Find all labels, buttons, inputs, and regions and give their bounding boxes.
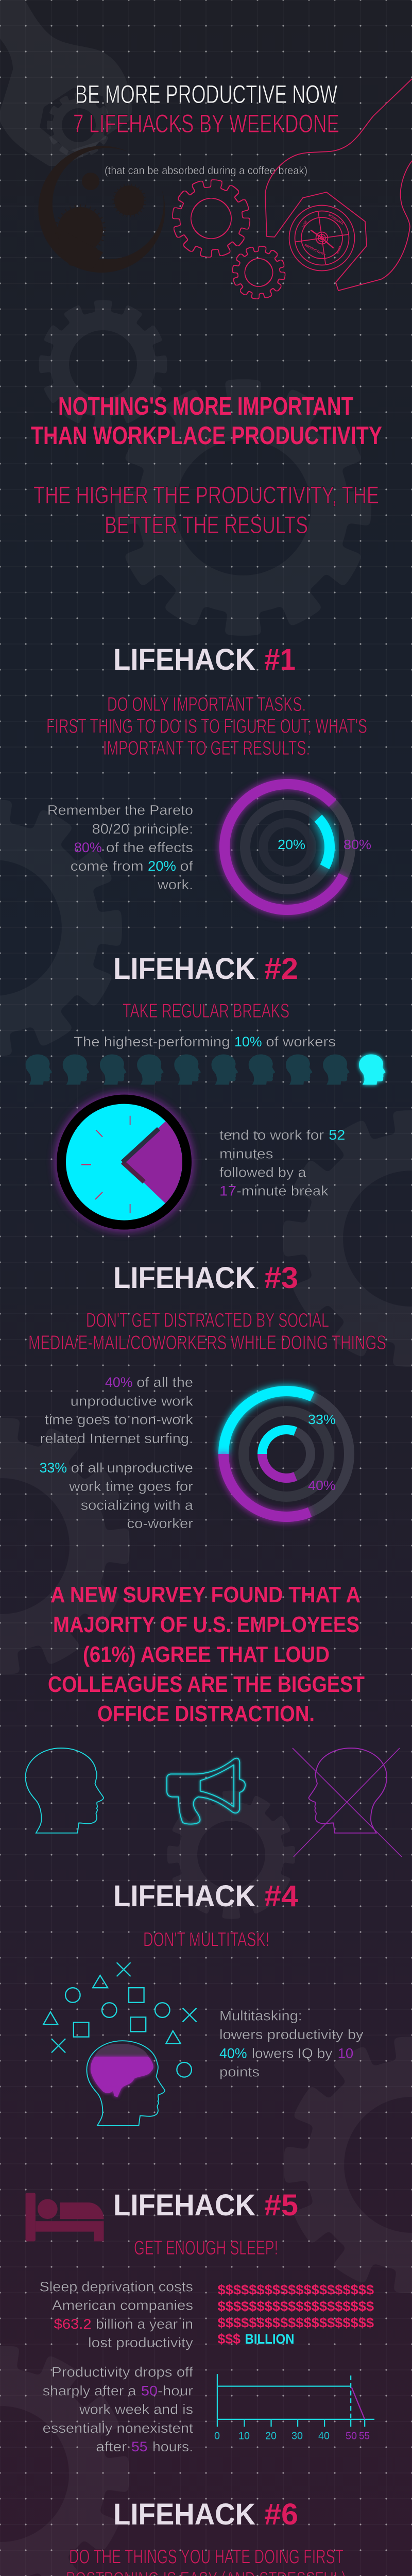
text: work and break: -minute break: [236, 1183, 329, 1198]
text: sleep deprivation: 50: [141, 2383, 158, 2399]
heading: LIFEHACK: [113, 1879, 255, 1913]
icon: clock: [55, 1093, 193, 1231]
text: multitasking: 10: [338, 2045, 353, 2061]
subheading: DON'T MULTITASK!: [143, 1929, 269, 1951]
panel: lifehack 3: [28, 1261, 386, 1531]
callout: loud colleagues survey: (61%) AGREE THAT LOUD: [83, 1642, 330, 1667]
panel: lifehack 5: [25, 2189, 374, 2454]
chart: productivity vs hours: [214, 2374, 374, 2442]
text: work and break: tend to work for: [219, 1127, 324, 1143]
chart: 80/20 donut: [225, 784, 371, 910]
chart: 80/20 donut: 20%: [278, 837, 305, 852]
chart: dollar count: $$$$$$$$$$$$$$$$$$$$: [217, 2282, 374, 2298]
chart: productivity vs hours: 10: [238, 2431, 250, 2442]
text: distraction stats: co-worker: [127, 1516, 193, 1531]
text: pareto: work.: [157, 877, 193, 892]
icons: ten heads: [26, 1054, 386, 1084]
text: work and break: 17: [219, 1183, 236, 1198]
icon: bed: [25, 2193, 104, 2242]
callout: loud colleagues survey: COLLEAGUES ARE THE BIGGEST: [48, 1672, 365, 1697]
panel: lifehack 6: [14, 2498, 400, 2576]
text: distraction stats: 40%: [105, 1375, 133, 1390]
icon: productivity gauge: [289, 205, 354, 271]
heading: #3: [264, 1261, 298, 1295]
text: pareto: 80%: [74, 840, 102, 855]
text: sleep deprivation: lost productivity: [88, 2335, 194, 2350]
icon: large gear outline: [177, 184, 246, 253]
callout: loud colleagues survey: OFFICE DISTRACTION.: [97, 1701, 315, 1726]
heading: LIFEHACK: [113, 643, 255, 676]
chart: dollar count: $$$: [217, 2331, 241, 2347]
chart: dollar count: BILLION: [245, 2331, 295, 2347]
text: sleep deprivation: Productivity drops off: [52, 2364, 194, 2380]
chart: dollar count: $$$$$$$$$$$$$$$$$$$$: [217, 2315, 374, 2330]
heading: LIFEHACK: [113, 1261, 255, 1295]
text: distraction stats: of all the: [136, 1375, 193, 1390]
text: higher productivity: [33, 481, 379, 538]
text: highest performing: [74, 1034, 336, 1049]
chart: dollar count: [217, 2282, 374, 2347]
chart: productivity vs hours: 40: [318, 2431, 330, 2442]
text: sleep deprivation: after: [96, 2439, 127, 2454]
text: distraction stats: of all unproductive: [71, 1460, 193, 1476]
heading: #6: [264, 2498, 298, 2531]
text: work and break: followed by a: [219, 1165, 306, 1180]
panel: lifehack 2: [26, 952, 386, 1231]
text: work and break: 52: [329, 1127, 345, 1143]
icon: crossed-out purple head: [293, 1748, 402, 1857]
text: distraction stats: socializing with a: [81, 1498, 193, 1513]
panel: lifehack 1: [46, 643, 371, 910]
chart: distraction donut: [224, 1391, 349, 1517]
title: [73, 80, 339, 138]
chart: dollar count: $$$$$$$$$$$$$$$$$$$$: [217, 2299, 374, 2314]
text: pareto: Remember the Pareto: [47, 803, 193, 818]
chart: productivity vs hours: 20: [265, 2431, 277, 2442]
chart: productivity vs hours: 30: [291, 2431, 303, 2442]
text: multitasking: Multitasking:: [219, 2008, 302, 2023]
subheading: [28, 1310, 386, 1354]
heading: LIFEHACK: [113, 2498, 255, 2531]
text: highest performing: The highest-performing: [74, 1034, 230, 1049]
subheading: [46, 693, 367, 759]
text: work and break: minutes: [219, 1146, 273, 1161]
chart: distraction donut: 40%: [308, 1478, 336, 1493]
text: pareto: 80/20 principle:: [92, 821, 193, 837]
text: multitasking: 40%: [219, 2045, 247, 2061]
background wrench silhouette: [0, 0, 132, 166]
heading: #4: [264, 1879, 298, 1913]
icon: megaphone: [167, 1758, 245, 1824]
text: sleep deprivation: essentially nonexistent: [43, 2420, 194, 2436]
heading: nothing's more important: [31, 393, 382, 450]
text: work and break: [219, 1127, 345, 1198]
panel: lifehack 4: [43, 1879, 364, 2126]
header section: [38, 79, 412, 296]
text: distraction stats: unproductive work: [71, 1394, 194, 1409]
text: sleep deprivation: [39, 2279, 194, 2454]
text: higher productivity: BETTER THE RESULTS: [105, 511, 308, 538]
subtitle: (that can be absorbed during a coffee break): [105, 165, 307, 177]
text: distraction stats: 33%: [39, 1460, 67, 1476]
icon: scattered task shapes: [43, 1962, 197, 2077]
subheading: IMPORTANT TO GET RESULTS.: [103, 737, 310, 759]
subheading: [66, 2546, 346, 2576]
text: sleep deprivation: $63.2: [54, 2316, 92, 2332]
text: highest performing: of workers: [266, 1034, 336, 1049]
subheading: TAKE REGULAR BREAKS: [123, 1000, 289, 1022]
icon: cyan head: [26, 1748, 104, 1833]
text: pareto: of the effects: [106, 840, 193, 855]
text: sleep deprivation: hours.: [152, 2439, 193, 2454]
heading: LIFEHACK: [113, 952, 255, 986]
subheading: DO ONLY IMPORTANT TASKS.: [107, 693, 306, 716]
text: sleep deprivation: 55: [131, 2439, 148, 2454]
icons: head, megaphone, crossed-out head: [26, 1748, 402, 1857]
heading: #2: [264, 952, 298, 986]
text: sleep deprivation: sharply after a: [43, 2383, 136, 2399]
icon: small gear outline: [236, 249, 282, 296]
callout: loud colleagues survey: A NEW SURVEY FOUND THAT A: [50, 1582, 360, 1607]
heading: LIFEHACK: [113, 2189, 255, 2222]
text: distraction stats: work time goes for: [68, 1479, 193, 1494]
icon: productivity gauge: MODERATE: [328, 214, 344, 226]
text: multitasking: lowers IQ by: [252, 2045, 333, 2061]
heading: #5: [264, 2189, 298, 2222]
text: sleep deprivation: billion a year in: [96, 2316, 193, 2332]
text: sleep deprivation: -hour: [158, 2383, 193, 2399]
text: distraction stats: [39, 1375, 194, 1531]
text: sleep deprivation: work week and is: [79, 2402, 193, 2417]
chart: productivity vs hours: 55: [359, 2431, 370, 2442]
text: distraction stats: related Internet surfing.: [40, 1431, 193, 1446]
icon: productivity gauge: PRODUCTIVITY: [304, 244, 326, 257]
callout: loud colleagues survey: MAJORITY OF U.S. EMPLOYEES: [53, 1612, 359, 1637]
intro section: [31, 393, 382, 538]
icon: productivity gauge: LOW: [302, 221, 308, 228]
text: highest performing: 10%: [234, 1034, 262, 1049]
icon: productivity gauge: HIGH: [336, 246, 342, 255]
callout: loud colleagues survey: [48, 1582, 365, 1726]
icon: head with half-lit brain: [87, 2041, 165, 2126]
chart: productivity vs hours: 50: [346, 2431, 357, 2442]
text: pareto: of: [180, 858, 194, 874]
icon: coffee stain: [38, 146, 165, 273]
text: pareto: 20%: [148, 858, 176, 874]
heading: #1: [264, 643, 296, 676]
chart: distraction donut: 33%: [308, 1412, 336, 1427]
text: multitasking: lowers productivity by: [219, 2027, 364, 2042]
chart: productivity vs hours: 0: [214, 2431, 220, 2442]
chart: 80/20 donut: 80%: [344, 837, 371, 852]
text: distraction stats: time goes to non-work: [45, 1412, 194, 1428]
text: pareto: come from: [71, 858, 144, 874]
subheading: GET ENOUGH SLEEP!: [134, 2237, 278, 2259]
text: multitasking: points: [219, 2064, 260, 2080]
text: sleep deprivation: American companies: [52, 2298, 193, 2313]
text: sleep deprivation: Sleep deprivation costs: [39, 2279, 193, 2294]
icon: wrench outline: [265, 79, 412, 291]
text: pareto: [47, 803, 194, 892]
text: multitasking: [219, 2008, 364, 2080]
